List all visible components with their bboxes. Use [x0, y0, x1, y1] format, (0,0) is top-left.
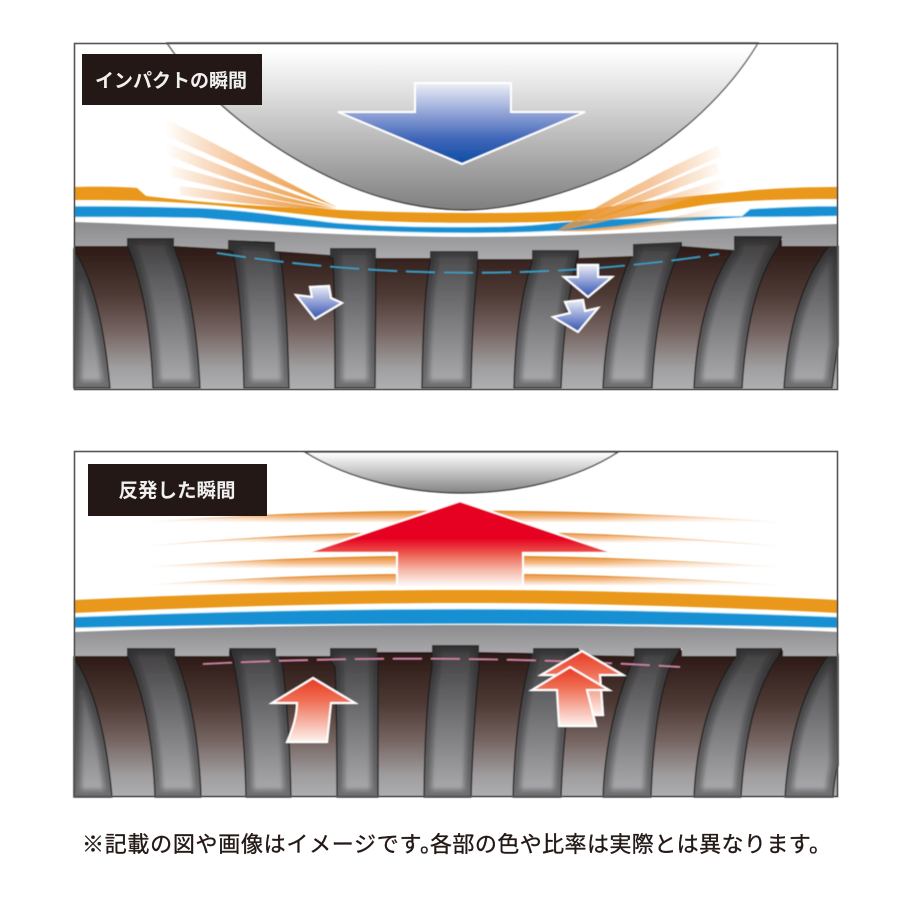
dashed deformation line	[203, 659, 680, 667]
arrow: large downward blue	[338, 83, 585, 164]
label: rebound: 反発した瞬間	[118, 480, 236, 502]
frame	[74, 44, 838, 390]
rib edge shading	[74, 643, 838, 797]
infographic	[72, 42, 840, 854]
orange streaks left	[163, 118, 337, 210]
dashed deformation line	[217, 253, 719, 273]
arrow: small up right front	[532, 667, 609, 726]
label: rebound	[88, 464, 267, 516]
arrow: small down right lower	[553, 300, 598, 332]
tire carcass grooves	[74, 240, 838, 389]
panel background	[74, 451, 838, 797]
orange layer	[74, 187, 838, 223]
frame	[74, 452, 838, 796]
arrow: small up left	[272, 678, 355, 742]
blue layer	[74, 206, 838, 233]
label: impact: インパクトの瞬間	[95, 70, 247, 92]
arrow: small down left	[296, 286, 342, 319]
artwork group: rebound	[74, 452, 838, 797]
arrow: small down right upper	[564, 265, 612, 297]
ball surface	[305, 452, 618, 493]
footnote: 各部の色や比率は実際とは異なります。	[430, 832, 831, 857]
small blue arrows	[296, 265, 612, 332]
gray rubber band	[74, 625, 838, 656]
rib outlines	[74, 236, 838, 388]
ball surface	[167, 43, 758, 210]
arrow: large upward red	[306, 501, 614, 587]
tire ribs	[74, 236, 838, 388]
small red arrows	[272, 651, 623, 742]
panel background	[74, 43, 838, 390]
panel: moment of rebound	[74, 451, 838, 797]
artwork group: impact	[74, 43, 838, 389]
footnote: ※記載の図や画像はイメージです。	[82, 832, 442, 857]
tire carcass grooves	[74, 650, 838, 797]
orange speed streaks	[150, 511, 775, 585]
tire ribs	[74, 643, 838, 797]
orange layer	[74, 590, 838, 613]
gray rubber band	[74, 222, 838, 259]
panel: moment of impact	[74, 43, 838, 390]
blue layer	[74, 609, 838, 628]
footnote	[82, 832, 831, 857]
label: impact	[82, 54, 262, 105]
orange streaks right	[556, 146, 738, 231]
arrow: small up right back	[541, 651, 623, 715]
rib outlines	[74, 643, 838, 797]
rib edge shading	[74, 236, 838, 388]
